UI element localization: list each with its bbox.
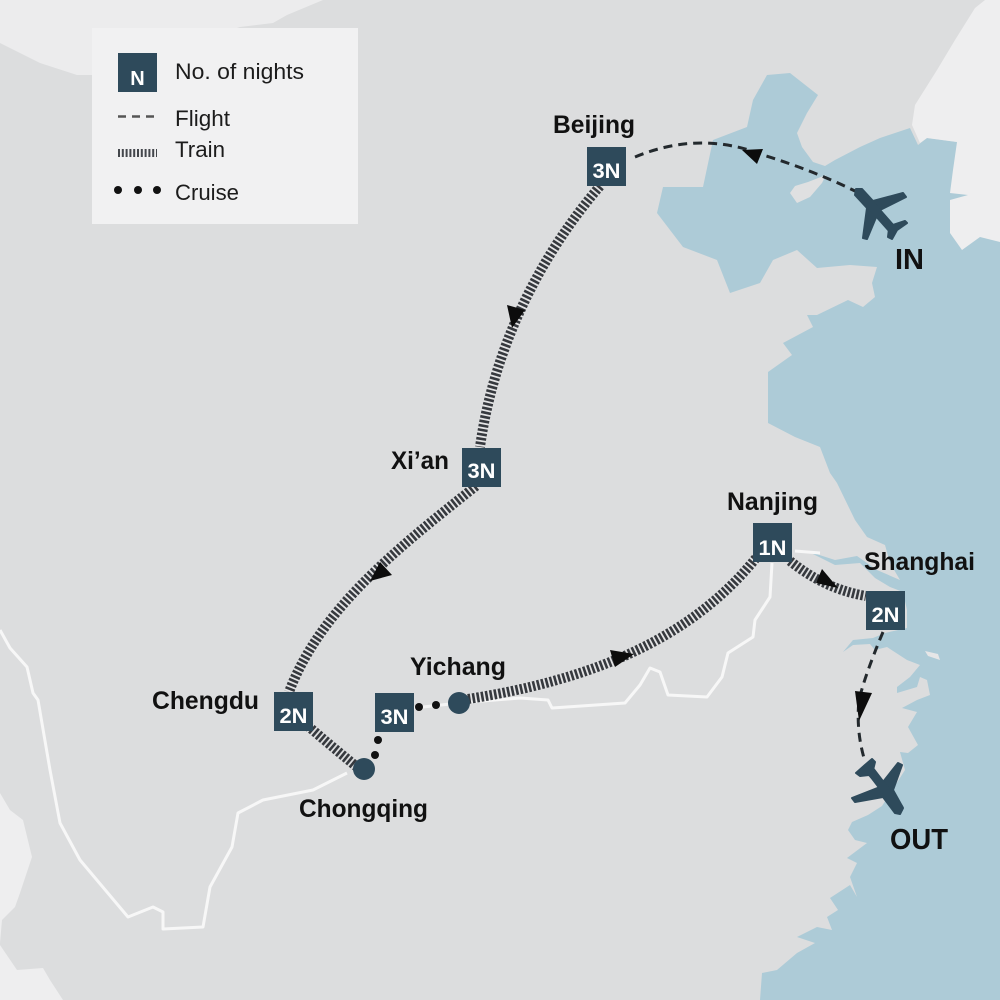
white river yangtze xyxy=(470,563,772,708)
legend: cruise xyxy=(114,180,239,205)
legend: flight xyxy=(118,106,230,131)
train Nanjing to Shanghai xyxy=(790,561,866,596)
korea peninsula xyxy=(912,0,1000,250)
train Chengdu to Chongqing xyxy=(308,726,357,767)
stop: Nanjing: Nanjing xyxy=(727,488,818,516)
legend: nights xyxy=(118,53,304,92)
arrow xyxy=(507,305,525,328)
white border west xyxy=(0,630,347,929)
stop: Shanghai xyxy=(864,548,975,630)
stop: Beijing xyxy=(553,111,635,186)
legend: flight: Flight xyxy=(175,106,230,131)
stop: Chongqing: Chongqing xyxy=(299,795,428,823)
offshore island xyxy=(925,651,940,660)
arrow xyxy=(855,691,872,721)
stop: Beijing: Beijing xyxy=(553,111,635,139)
stop: Chengdu: Chengdu xyxy=(152,687,259,715)
stop: Yichang xyxy=(410,653,506,714)
arrow xyxy=(816,569,838,588)
stop: Xi'an: Xi’an xyxy=(391,447,449,475)
arrow xyxy=(742,149,763,164)
train Beijing to Xi'an xyxy=(480,186,600,447)
legend panel xyxy=(92,28,358,224)
white river east xyxy=(795,551,820,553)
flight route Shanghai to out xyxy=(855,632,883,758)
sea and bohai region xyxy=(657,73,1000,1000)
stop: Nanjing xyxy=(727,488,818,562)
stop: Beijing: 3N xyxy=(592,160,620,183)
stop: cruise 3N: 3N xyxy=(380,706,408,729)
flight route in to Beijing xyxy=(635,143,855,191)
legend: train: Train xyxy=(175,137,225,162)
legend: cruise: Cruise xyxy=(175,180,239,205)
arrow xyxy=(610,650,634,667)
stop: Shanghai: Shanghai xyxy=(864,548,975,576)
stop: Shanghai: 2N xyxy=(872,604,900,627)
stop: Chongqing xyxy=(299,758,428,823)
land sliver in bohai xyxy=(790,175,826,203)
label: IN: IN xyxy=(895,244,924,276)
stop: Xi'an: 3N xyxy=(468,460,496,483)
stop: Xi'an xyxy=(391,447,501,487)
stop: Nanjing: 1N xyxy=(758,537,786,560)
cruise Chongqing to Yichang xyxy=(371,701,450,759)
stop: Yichang: Yichang xyxy=(410,653,506,681)
train Xi'an to Chengdu xyxy=(289,486,476,692)
label: OUT: OUT xyxy=(890,824,948,856)
neighbouring land: south west xyxy=(0,945,63,1000)
icon: plane out xyxy=(852,759,903,814)
neighbouring land: west xyxy=(0,793,32,943)
stop: Chengdu: 2N xyxy=(280,705,308,728)
stop: Chengdu xyxy=(152,687,313,731)
neighbouring land: top left xyxy=(0,0,323,75)
legend: nights: N xyxy=(130,68,145,90)
legend: train xyxy=(118,137,225,162)
icon: plane in xyxy=(855,189,907,239)
train Yichang to Nanjing xyxy=(468,558,756,699)
arrow xyxy=(370,562,392,581)
legend: nights: No. of nights xyxy=(175,59,304,84)
stop: cruise 3N xyxy=(375,693,414,732)
